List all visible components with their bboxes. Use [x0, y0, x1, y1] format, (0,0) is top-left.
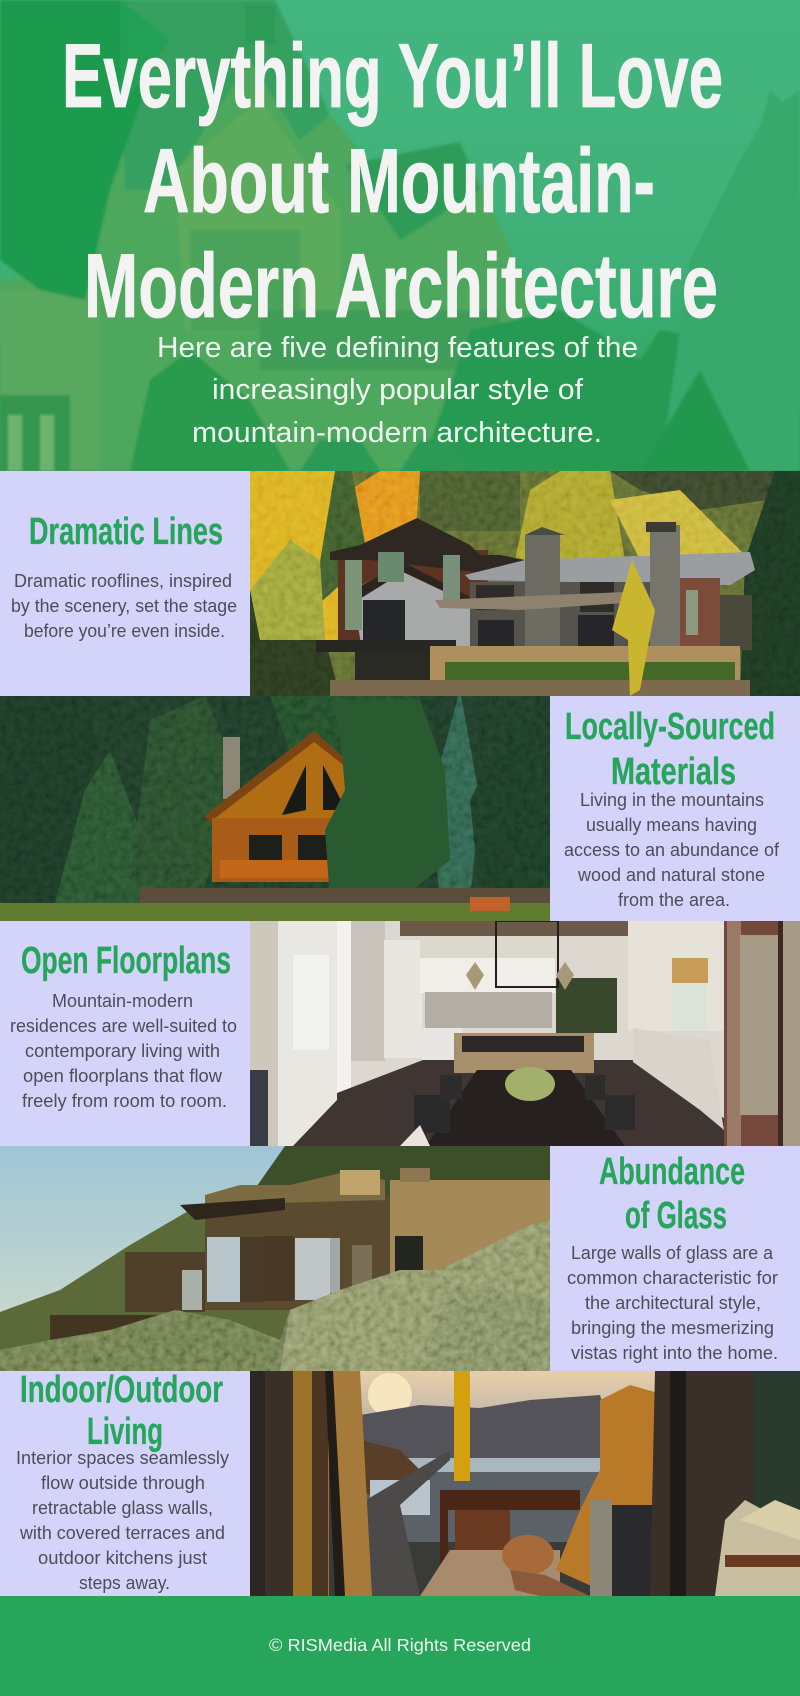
- panel: locally-sourced materials: [0, 690, 800, 921]
- subtitle: Here are five defining features of the: [157, 332, 638, 364]
- heading: [20, 1369, 223, 1453]
- body text: outdoor kitchens just: [38, 1547, 207, 1568]
- title: [62, 26, 723, 337]
- body text: Dramatic rooflines, inspired: [14, 570, 232, 591]
- photo: hillside adobe house: [0, 1146, 550, 1371]
- body text: steps away.: [79, 1572, 170, 1593]
- text box: [0, 1371, 250, 1596]
- body text: [567, 1242, 778, 1363]
- panel: header: [0, 0, 800, 471]
- body text: freely from room to room.: [22, 1090, 227, 1111]
- body text: bringing the mesmerizing: [571, 1317, 774, 1338]
- subtitle: increasingly popular style of: [212, 374, 584, 406]
- text box: [550, 1146, 800, 1371]
- body text: by the scenery, set the stage: [11, 595, 237, 616]
- cabin: [204, 731, 345, 882]
- body text: common characteristic for: [567, 1267, 778, 1288]
- body text: from the area.: [618, 889, 730, 910]
- body text: residences are well-suited to: [10, 1015, 237, 1036]
- house: [316, 518, 755, 680]
- body text: [11, 570, 237, 641]
- heading: Materials: [611, 751, 736, 793]
- photo: kitchen interior: [250, 921, 800, 1146]
- body text: contemporary living with: [25, 1040, 220, 1061]
- heading: Indoor/Outdoor: [20, 1369, 223, 1411]
- body text: [16, 1447, 230, 1593]
- body text: [564, 789, 780, 910]
- body text: vistas right into the home.: [571, 1342, 778, 1363]
- body text: before you’re even inside.: [24, 620, 225, 641]
- panel: open floorplans: [0, 921, 800, 1146]
- heading: [599, 1151, 745, 1237]
- photo: log cabin in forest: [0, 690, 550, 921]
- subtitle: [157, 332, 638, 449]
- body text: Mountain-modern: [52, 990, 193, 1011]
- heading: Living: [87, 1411, 163, 1453]
- heading: Abundance: [599, 1151, 745, 1193]
- photo: woman on balcony: [250, 1371, 800, 1596]
- body text: with covered terraces and: [19, 1522, 225, 1543]
- body text: the architectural style,: [585, 1292, 761, 1313]
- body text: usually means having: [586, 814, 757, 835]
- heading: of Glass: [625, 1195, 727, 1237]
- body text: Living in the mountains: [580, 789, 764, 810]
- text box: [0, 471, 250, 696]
- panel: dramatic lines: [0, 471, 800, 696]
- building: [50, 1168, 550, 1345]
- header background photo with green overlay: [0, 0, 800, 471]
- text box: [0, 921, 250, 1146]
- body text: wood and natural stone: [577, 864, 765, 885]
- photo: house with autumn trees: [250, 471, 800, 696]
- subtitle: mountain-modern architecture.: [192, 417, 602, 449]
- heading: Open Floorplans: [21, 940, 231, 982]
- panel: abundance of glass: [0, 1146, 800, 1371]
- body text: Interior spaces seamlessly: [16, 1447, 230, 1468]
- panel: indoor/outdoor living: [0, 1369, 800, 1596]
- body text: open floorplans that flow: [23, 1065, 223, 1086]
- text box: [550, 696, 800, 921]
- copyright line: © RISMedia All Rights Reserved: [269, 1635, 531, 1655]
- footer: [0, 1596, 800, 1696]
- body text: access to an abundance of: [564, 839, 780, 860]
- body text: flow outside through: [41, 1472, 205, 1493]
- body text: retractable glass walls,: [32, 1497, 213, 1518]
- body text: Large walls of glass are a: [571, 1242, 774, 1263]
- body text: [10, 990, 237, 1111]
- heading: [565, 706, 775, 793]
- heading: Dramatic Lines: [29, 511, 223, 553]
